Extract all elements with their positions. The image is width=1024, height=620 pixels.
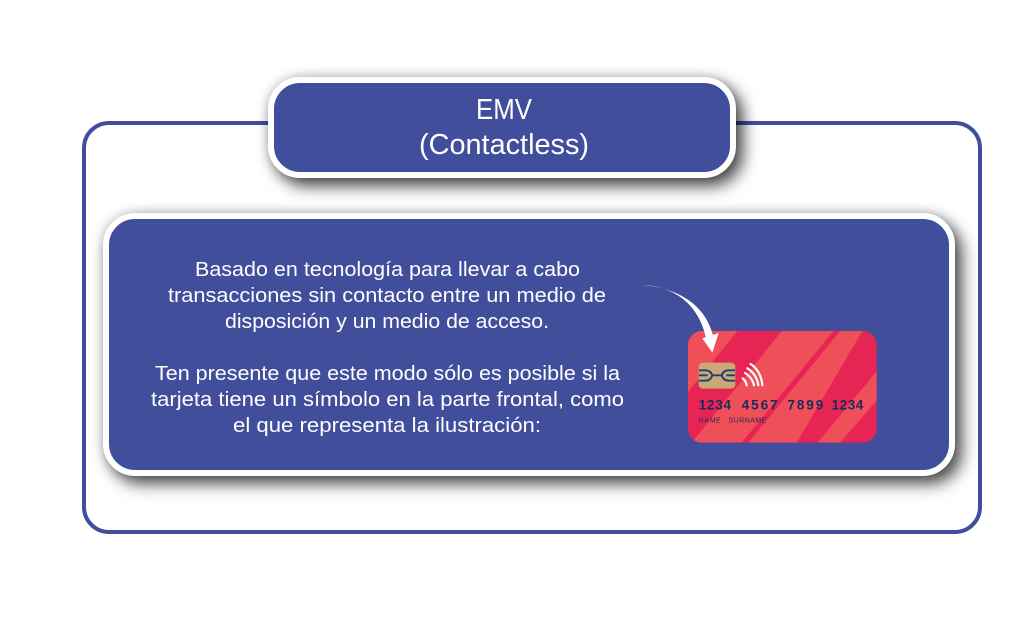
title: [419, 94, 589, 161]
card number: 1234: [832, 397, 864, 412]
card holder name: NAME: [699, 418, 721, 425]
card number: 4567: [742, 397, 778, 412]
card holder name: [699, 418, 767, 425]
card number: 7899: [787, 397, 824, 412]
panel: description: [103, 213, 955, 476]
text block and card illustration: [151, 261, 877, 443]
text block: definition: Basado en tecnología para llevar a cabo: [195, 258, 580, 281]
card holder name: SURNAME: [729, 418, 767, 425]
icon: contactless waves: [743, 364, 762, 385]
text block: definition: [168, 258, 606, 333]
text block: note: Ten presente que este modo sólo es posible si la: [155, 362, 621, 385]
arrow: [642, 285, 719, 353]
text block: note: [151, 362, 624, 437]
text block: note: tarjeta tiene un símbolo en la parte frontal, como: [151, 388, 624, 411]
title: EMV: [476, 94, 532, 126]
panel: outer frame: [82, 121, 982, 534]
panel: title header: [268, 77, 736, 178]
card number: [699, 397, 864, 412]
title: (Contactless): [419, 129, 589, 161]
text block: definition: transacciones sin contacto entre un medio de: [168, 284, 606, 307]
icon: credit card: [683, 327, 880, 443]
text block: definition: disposición y un medio de acceso.: [225, 310, 549, 333]
icon: chip: [699, 363, 735, 389]
text block: note: el que representa la ilustración:: [233, 414, 541, 437]
card number: 1234: [699, 397, 731, 412]
